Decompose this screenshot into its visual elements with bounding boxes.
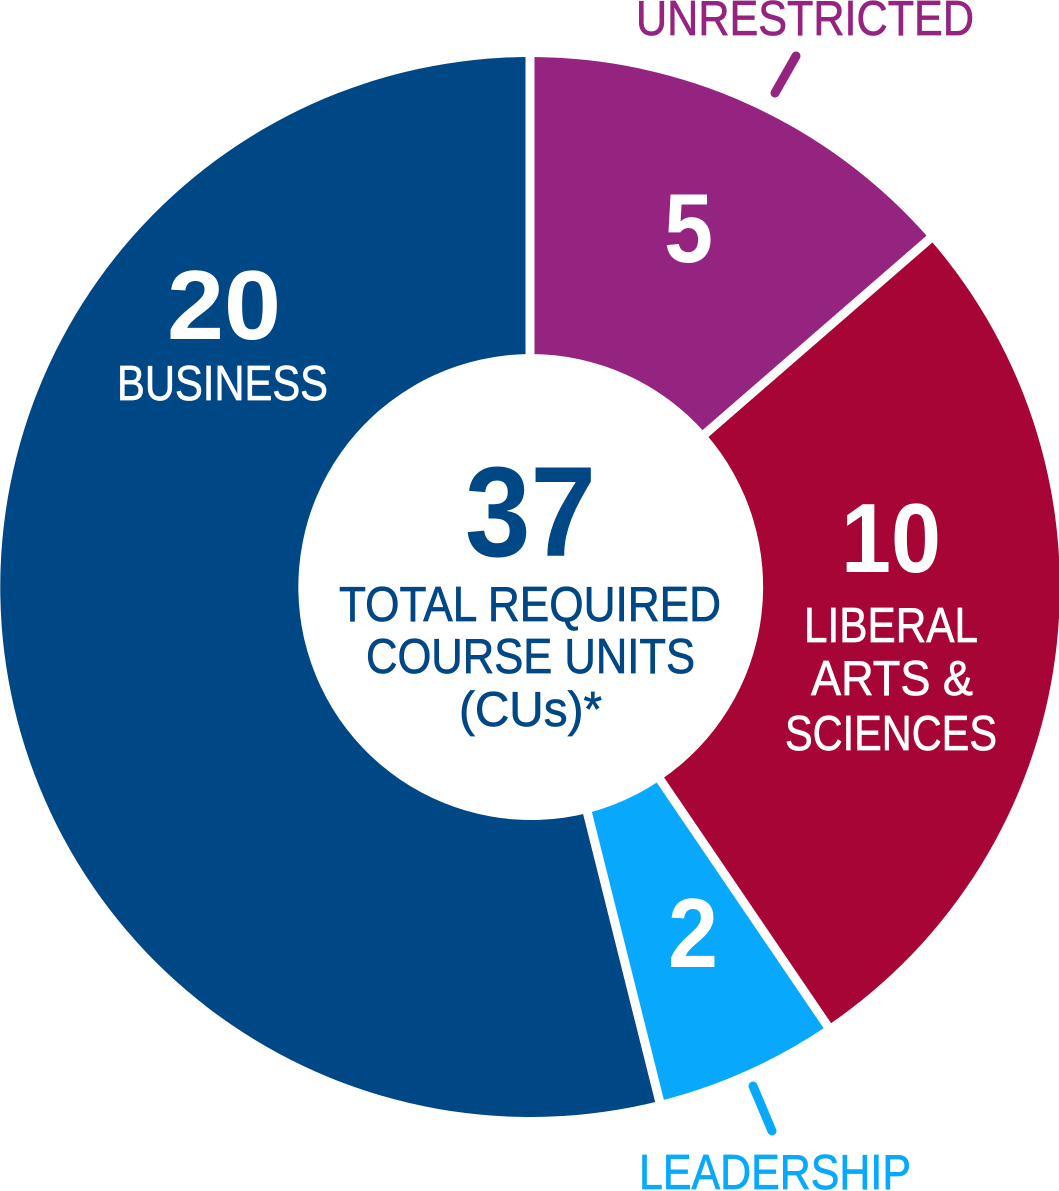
value: 5: 5 — [664, 173, 713, 283]
label: arts and: ARTS & — [811, 652, 973, 706]
value: 2: 2 — [668, 878, 718, 988]
label: liberal: LIBERAL — [804, 599, 978, 653]
label: course units: COURSE UNITS — [366, 630, 695, 684]
value: 20: 20 — [167, 250, 281, 360]
segment: unrestricted 5 — [530, 57, 930, 434]
tick: leadership — [753, 1086, 772, 1131]
business label group — [117, 250, 328, 411]
label: sciences: SCIENCES — [785, 707, 997, 761]
tick: unrestricted — [775, 56, 796, 93]
liberal arts label group — [785, 483, 997, 761]
label: business: BUSINESS — [117, 357, 328, 411]
segment: business 20 — [0, 57, 660, 1117]
value: 10: 10 — [841, 483, 941, 593]
label: CUs: (CUs)* — [459, 683, 602, 737]
value: 37: 37 — [465, 441, 596, 584]
label: total required: TOTAL REQUIRED — [339, 578, 721, 632]
center total group — [339, 441, 721, 737]
segment: liberal arts and sciences 10 — [660, 239, 1059, 1026]
segment: leadership 2 — [588, 780, 827, 1101]
